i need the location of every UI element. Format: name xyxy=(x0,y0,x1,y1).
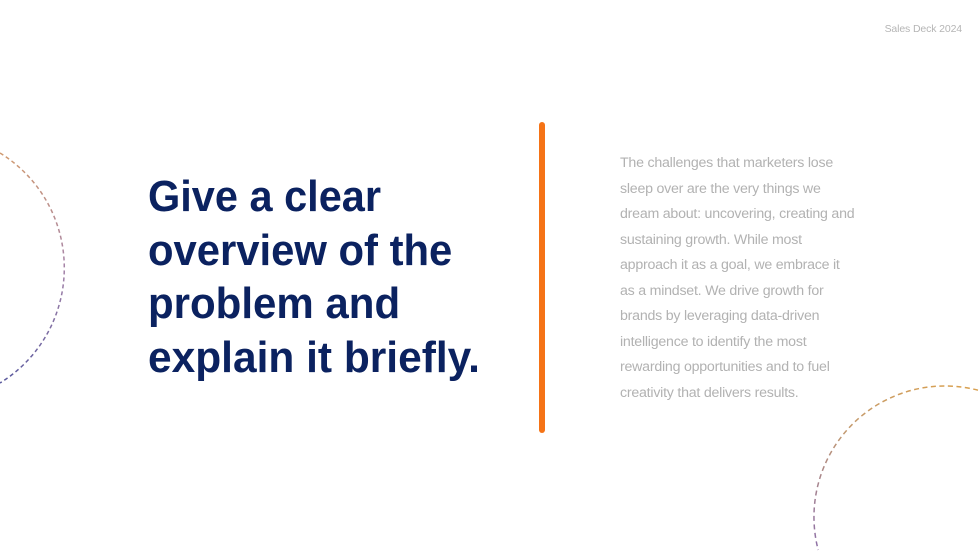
body text: approach it as a goal, we embrace it xyxy=(620,257,840,273)
body text xyxy=(620,155,854,400)
body text: brands by leveraging data-driven xyxy=(620,308,819,324)
body text: sleep over are the very things we xyxy=(620,180,821,196)
orange divider bar xyxy=(539,122,545,433)
body text: intelligence to identify the most xyxy=(620,334,806,350)
title xyxy=(148,172,480,382)
body text: rewarding opportunities and to fuel xyxy=(620,359,830,375)
body text: dream about: uncovering, creating and xyxy=(620,206,854,222)
header label: Sales Deck 2024 xyxy=(885,23,962,35)
title: explain it briefly. xyxy=(148,333,480,382)
title: Give a clear xyxy=(148,172,381,221)
body text: The challenges that marketers lose xyxy=(620,155,833,171)
title: overview of the xyxy=(148,226,452,275)
body text: creativity that delivers results. xyxy=(620,384,798,400)
body text: as a mindset. We drive growth for xyxy=(620,282,823,298)
body text: sustaining growth. While most xyxy=(620,232,802,248)
title: problem and xyxy=(148,279,400,328)
